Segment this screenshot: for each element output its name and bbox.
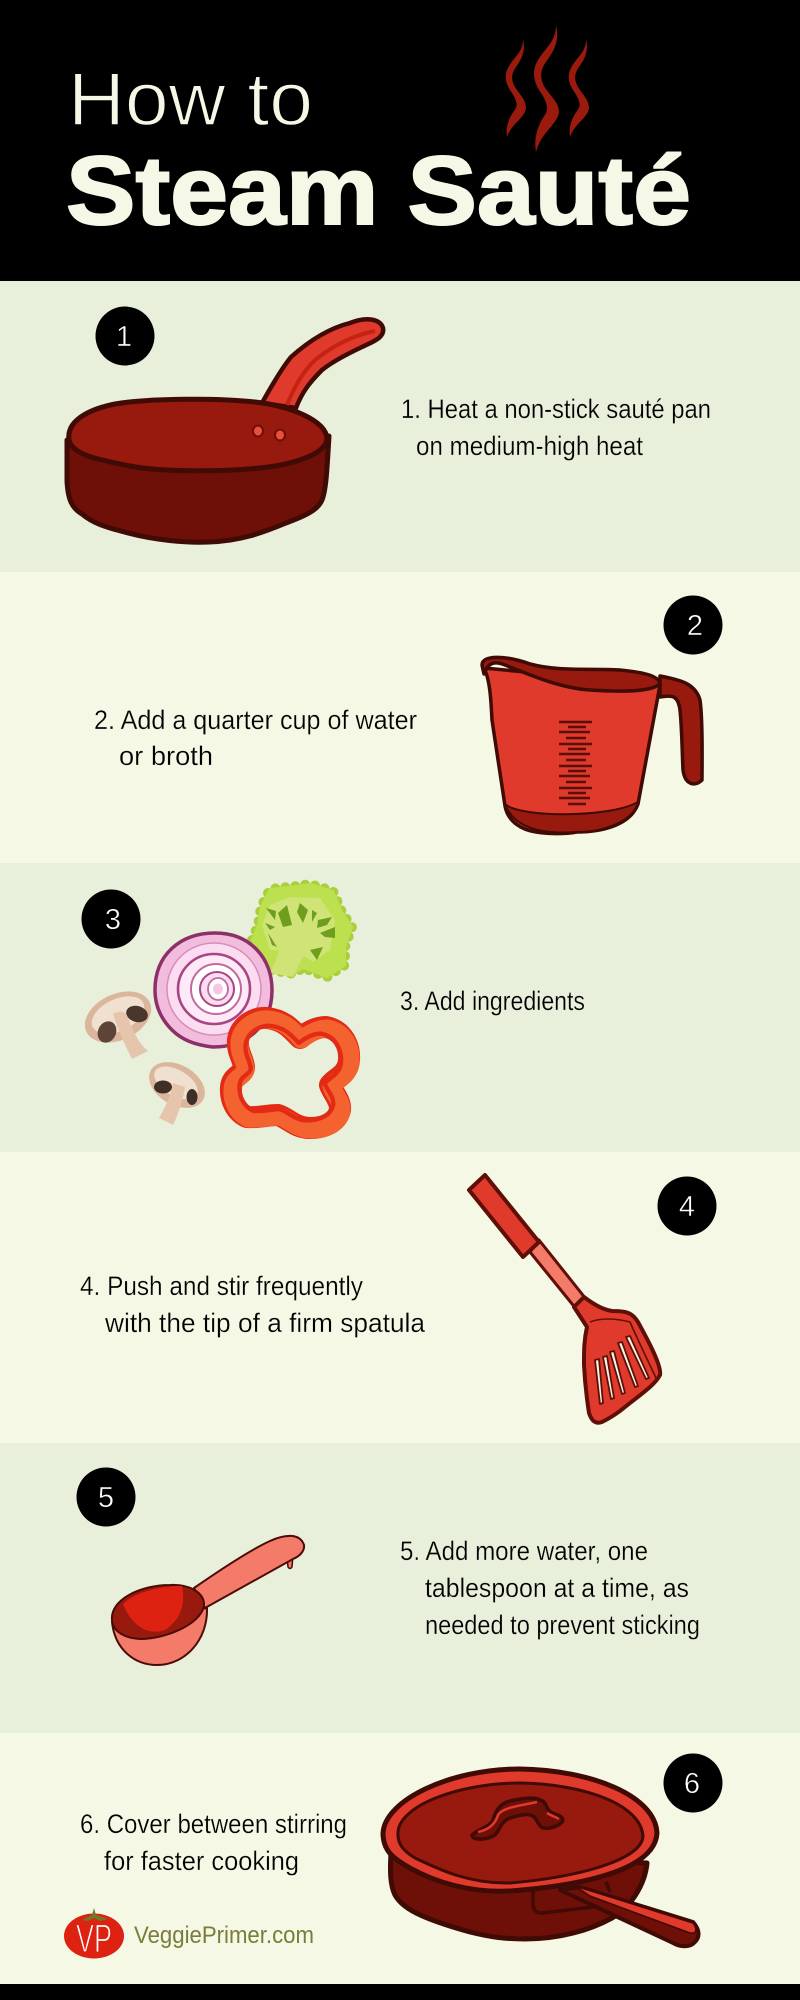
number badge 3	[82, 890, 140, 948]
header panel	[0, 0, 800, 281]
number badge 3: 3	[105, 904, 121, 936]
step 6 text	[80, 1809, 347, 1876]
step 2 text: 2. Add a quarter cup of water	[94, 705, 417, 735]
icon: red onion slice	[155, 933, 272, 1047]
step 4 text	[80, 1271, 426, 1338]
panel: step 3	[0, 863, 800, 1152]
footer bar	[0, 1984, 800, 2000]
number badge 6: 6	[684, 1768, 700, 1800]
icon: mushroom small	[141, 1053, 213, 1125]
step 6 text: 6. Cover between stirring	[80, 1809, 347, 1839]
panel: step 4	[0, 1152, 800, 1443]
icon: measuring spoon	[112, 1536, 304, 1665]
step 4 text: 4. Push and stir frequently	[80, 1271, 363, 1301]
step 5 text: 5. Add more water, one	[400, 1536, 648, 1566]
step 2 text	[94, 705, 417, 771]
panel: step 1	[0, 281, 800, 572]
icon: steam waves	[506, 25, 589, 152]
icon: covered pan	[383, 1769, 699, 1946]
icon: mushroom large	[77, 981, 159, 1059]
number badge 5: 5	[98, 1482, 114, 1514]
number badge 6	[664, 1754, 722, 1812]
number badge 4	[658, 1176, 716, 1236]
number badge 4: 4	[679, 1191, 695, 1223]
step 4 text: with the tip of a firm spatula	[104, 1308, 426, 1338]
step 5 text	[400, 1536, 700, 1640]
panel: step 2	[0, 572, 800, 863]
step 1 text: 1. Heat a non-stick sauté pan	[401, 394, 711, 424]
step 6 text: for faster cooking	[104, 1846, 299, 1876]
step 3 text: 3. Add ingredients	[400, 986, 585, 1016]
title: Steam Sauté: Steam Sauté	[66, 136, 691, 245]
step 2 text: or broth	[119, 741, 213, 771]
logo text: VeggiePrimer.com	[134, 1922, 314, 1949]
icon: red pepper ring	[231, 1018, 351, 1130]
panel: step 6	[0, 1733, 800, 1984]
number badge 2: 2	[687, 610, 703, 642]
icon: measuring cup	[482, 657, 702, 834]
title: How to: How to	[68, 57, 313, 141]
icon: saute pan	[67, 319, 383, 542]
number badge 1: 1	[116, 321, 132, 353]
logo: VeggiePrimer tomato: VP	[76, 1917, 112, 1961]
icon: spatula	[469, 1175, 660, 1423]
icon: broccoli	[252, 884, 352, 977]
step 5 text: needed to prevent sticking	[425, 1610, 700, 1640]
step 5 text: tablespoon at a time, as	[425, 1573, 689, 1603]
number badge 2	[664, 596, 722, 654]
number badge 5	[76, 1468, 136, 1526]
number badge 1	[96, 306, 154, 366]
step 1 text	[401, 394, 711, 461]
step 1 text: on medium-high heat	[416, 431, 643, 461]
panel: step 5	[0, 1443, 800, 1733]
logo: VeggiePrimer tomato	[64, 1908, 124, 1961]
